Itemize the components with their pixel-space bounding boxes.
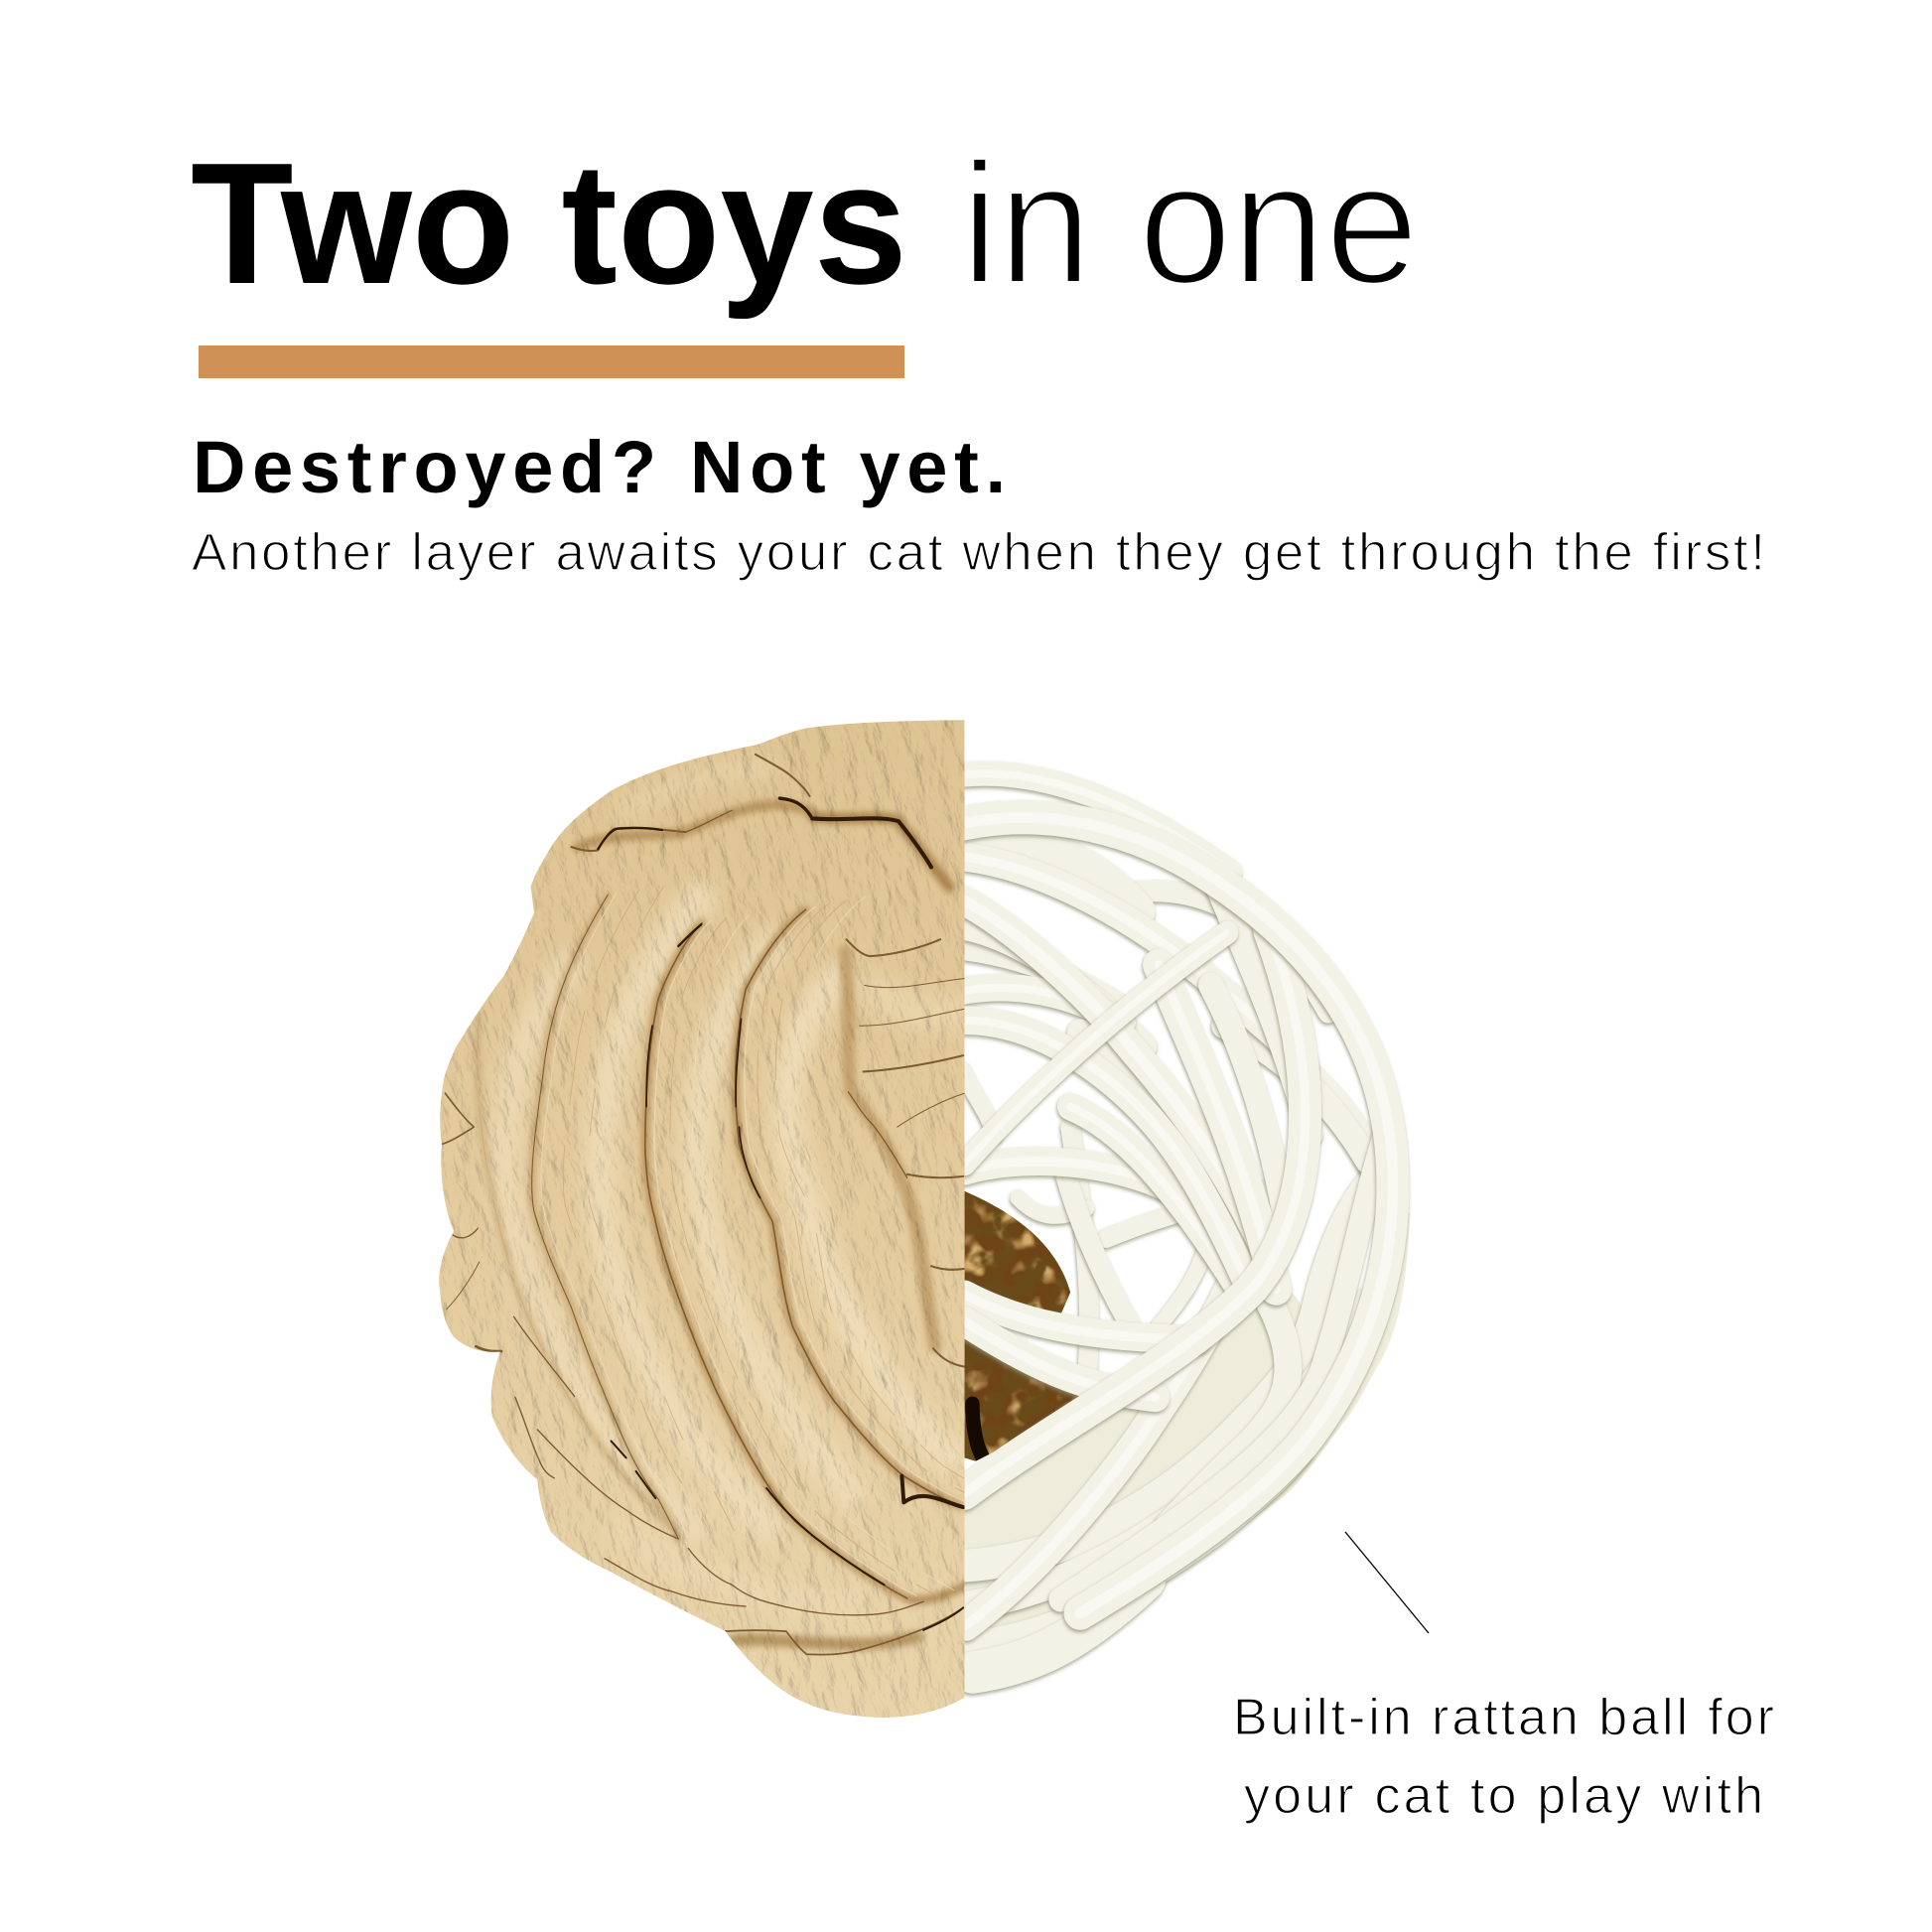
subheading: Destroyed? Not yet. — [193, 426, 1006, 508]
title: Two toys — [191, 126, 907, 320]
lower bundled strands — [965, 1168, 1387, 1566]
soft shadows — [478, 805, 965, 1644]
callout leader line — [1345, 1532, 1429, 1633]
accent bar — [199, 345, 904, 378]
paper fibres — [477, 886, 965, 1596]
rattan inner half — [963, 773, 1410, 1691]
big front arc — [965, 931, 1306, 1493]
paper creases — [443, 755, 965, 1655]
ball illustration — [439, 720, 1423, 1718]
soft highlights — [505, 769, 956, 1606]
callout text: Built-in rattan ball for — [1233, 1689, 1774, 1746]
lower rattan crescent — [965, 1211, 1410, 1628]
callout text — [1233, 1689, 1774, 1825]
infographic canvas — [193, 159, 1773, 1823]
callout text: your cat to play with — [1244, 1767, 1763, 1825]
paper wrapped half — [439, 720, 965, 1718]
catnip core — [965, 1191, 1079, 1461]
back strands — [1139, 891, 1328, 1013]
front diagonal strand — [965, 932, 1227, 1165]
strands over catnip — [965, 1295, 1197, 1339]
paper crinkle texture — [441, 721, 965, 1718]
outer ring — [965, 773, 1230, 872]
front strands — [965, 1162, 1166, 1186]
title — [191, 126, 1419, 320]
title: in one — [961, 126, 1419, 320]
description text: Another layer awaits your cat when they get through the first! — [192, 523, 1765, 582]
